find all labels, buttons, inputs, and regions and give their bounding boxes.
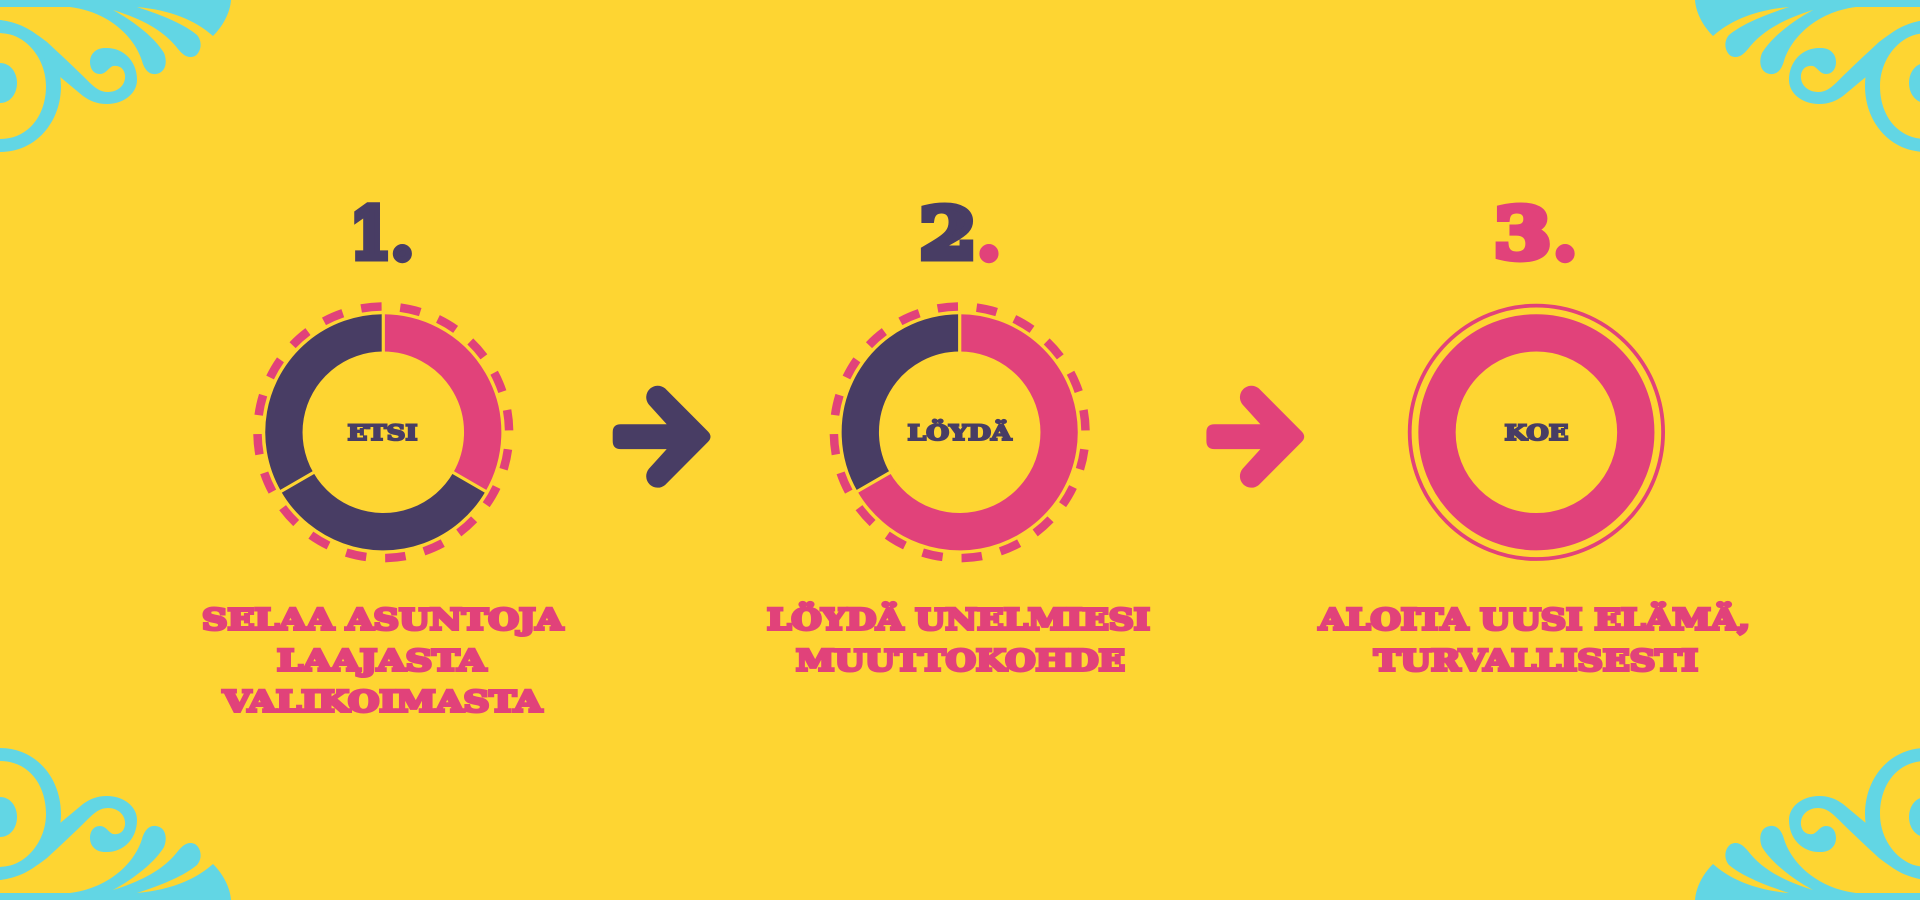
ornament: bottom left corner (0, 748, 231, 900)
step 3 number (1494, 192, 1577, 276)
step 3 full ring (1410, 306, 1663, 559)
step 3 number: 3 (1494, 192, 1551, 275)
pink segment (383, 333, 483, 482)
step 1 ring label: ETSI (348, 421, 418, 446)
step 2 caption (767, 602, 1150, 678)
step 3 number: . (1553, 196, 1577, 276)
step 1 caption: LAAJASTA (277, 644, 487, 678)
step 3 caption: ALOITA UUSI ELÄMÄ, (1318, 602, 1750, 636)
step 2 donut chart (834, 306, 1086, 558)
pink segment (874, 333, 1059, 532)
step 1 number: . (390, 196, 414, 276)
step 2 number: . (977, 196, 1001, 276)
dashed outer ring (258, 306, 509, 558)
arrow: step 2 to step 3 (1206, 386, 1304, 488)
dashed outer ring (834, 306, 1086, 558)
step 3 caption (1318, 602, 1750, 678)
arrow: step 1 to step 2 (613, 386, 710, 488)
ornament: bottom right corner (1695, 748, 1920, 900)
step 1 donut chart (258, 306, 509, 558)
step 2 number: 2 (920, 192, 976, 275)
step 1 caption: VALIKOIMASTA (222, 684, 543, 718)
step 2 number (920, 192, 1001, 276)
navy segment (284, 333, 469, 532)
navy segment (860, 333, 960, 482)
step 2 caption: MUUTTOKOHDE (796, 644, 1125, 678)
step 2 ring label: LÖYDÄ (908, 418, 1012, 446)
ornament: top left corner (0, 0, 231, 152)
step 2 caption: LÖYDÄ UNELMIESI (767, 602, 1150, 636)
step 1 caption (202, 602, 564, 718)
step 3 caption: TURVALLISESTI (1374, 644, 1698, 678)
ornament: top right corner (1695, 0, 1920, 152)
step 1 caption: SELAA ASUNTOJA (202, 602, 564, 636)
step 1 number: 1 (350, 192, 391, 275)
step 3 ring label: KOE (1504, 421, 1568, 446)
